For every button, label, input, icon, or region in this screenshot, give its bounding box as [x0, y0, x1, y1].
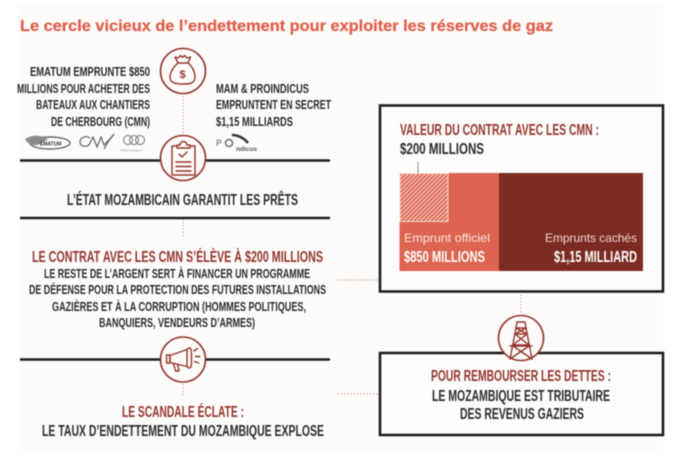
- icon: money bag: [160, 48, 206, 94]
- label: official loan: Emprunt officiel: [404, 231, 490, 245]
- logo: Ematum: EMATUM: [40, 142, 62, 148]
- amount: 200 million: $200 MILLIONS: [400, 141, 484, 158]
- text: scandal: [42, 402, 324, 440]
- logo: Proindicus: ndicus: [236, 146, 257, 153]
- label: hidden loans: [545, 231, 637, 266]
- panel: contract value: [380, 106, 663, 292]
- text: CMN contract: [29, 247, 326, 330]
- body: use of funds: DE DÉFENSE POUR LA PROTECTION DES FUTURES INSTALLATIONS: [29, 282, 326, 297]
- icon: megaphone: [160, 337, 206, 382]
- logo: CMN: [80, 134, 114, 149]
- text: State guarantee: L’ÉTAT MOZAMBICAIN GARANTIT LES PRÊTS: [67, 190, 298, 209]
- label: official loan: $850 MILLIONS: [404, 249, 485, 266]
- logo: Proindicus: [216, 135, 257, 153]
- text: repayment: DES REVENUS GAZIERS: [460, 406, 584, 423]
- body: use of funds: BANQUIERS, VENDEURS D’ARMES): [99, 315, 255, 330]
- text: Ematum loan: MILLIONS POUR ACHETER DES: [17, 81, 150, 96]
- dotted connectors: [183, 96, 521, 397]
- icon: gas derrick: [498, 316, 544, 360]
- divider lines: [20, 160, 330, 360]
- text: Ematum loan: [17, 64, 150, 129]
- text: MAM and Proindicus loans: $1,15 MILLIARDS: [216, 114, 293, 129]
- body: use of funds: LE RESTE DE L’ARGENT SERT À FINANCER UN PROGRAMME: [44, 266, 310, 281]
- logo: Proindicus: P: [216, 138, 222, 148]
- body: use of funds: GAZIÈRES ET À LA CORRUPTION (HOMMES POLITIQUES,: [52, 299, 306, 314]
- text: MAM and Proindicus loans: MAM & PROINDICUS: [216, 81, 309, 96]
- logos: Ematum, CMN, Privinvest: [25, 134, 144, 152]
- text: Ematum loan: EMATUM EMPRUNTE $850: [30, 64, 150, 79]
- text: Ematum loan: DE CHERBOURG (CMN): [51, 114, 150, 129]
- tick: [417, 162, 419, 173]
- text: scandal: LE TAUX D’ENDETTEMENT DU MOZAMBIQUE EXPLOSE: [42, 423, 324, 440]
- text: repayment: [431, 368, 611, 423]
- text: MAM and Proindicus loans: [216, 81, 331, 129]
- body: use of funds: [29, 266, 326, 330]
- icon: clipboard: [160, 136, 206, 180]
- label: official loan: [404, 231, 490, 266]
- text: Ematum loan: BATEAUX AUX CHANTIERS: [36, 97, 150, 112]
- icon: money bag: $: [179, 69, 186, 81]
- heading: contract value: LE CONTRAT AVEC LES CMN S’ÉLÈVE À $200 MILLIONS: [32, 247, 323, 266]
- text: MAM and Proindicus loans: EMPRUNTENT EN SECRET: [216, 97, 331, 112]
- logo: Privinvest: PRIVINVEST: [120, 148, 143, 152]
- label: hidden loans: Emprunts cachés: [545, 231, 637, 245]
- chart: official and hidden loans: [400, 173, 643, 271]
- text: scandal: LE SCANDALE ÉCLATE :: [122, 402, 244, 421]
- label: hidden loans: $1,15 MILLIARD: [554, 249, 637, 266]
- panel: debt repayment: [380, 316, 663, 435]
- title: Le cercle vicieux de l’endettement pour exploiter les réserves de gaz: [20, 18, 553, 35]
